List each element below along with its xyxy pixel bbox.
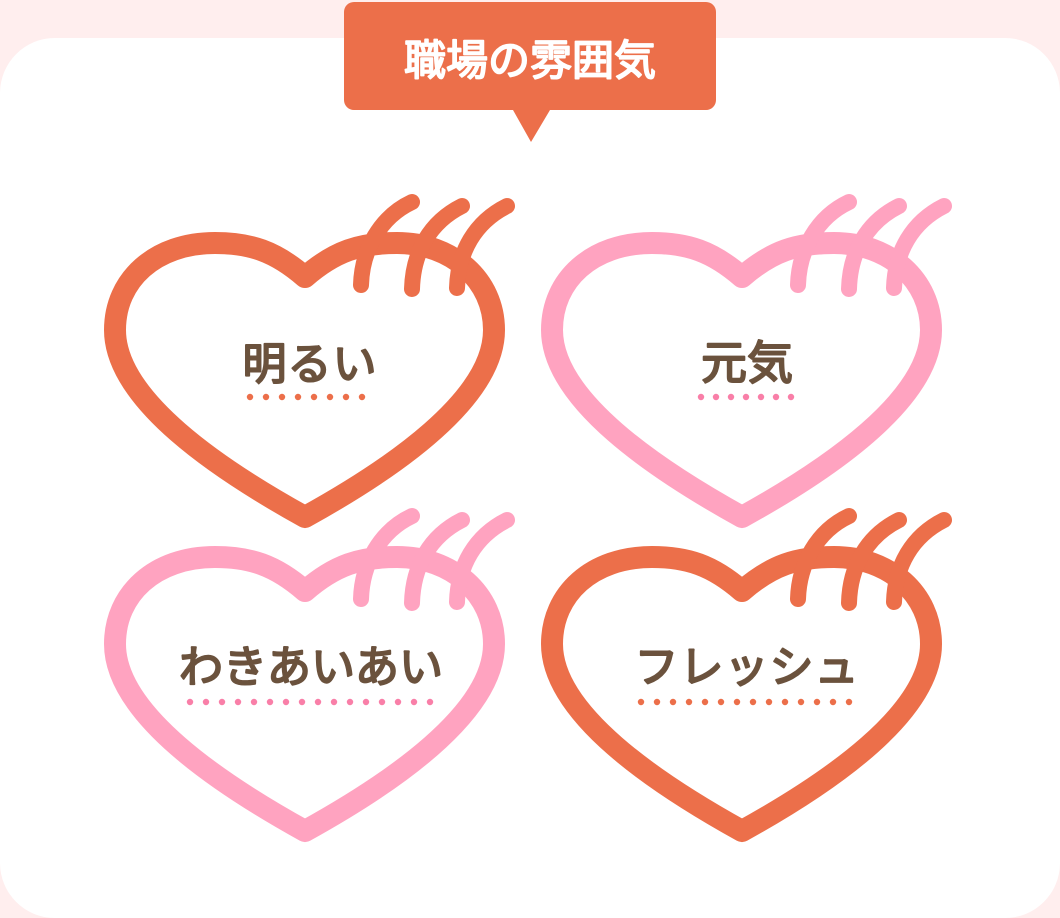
label: フレッシュ: フレッシュ — [634, 643, 860, 692]
icon: pink lashes — [361, 516, 507, 603]
heart card: フレッシュ — [552, 516, 944, 831]
label: 明るい: 明るい — [242, 340, 378, 389]
dotted underline — [641, 699, 856, 705]
icon: orange heart outline — [552, 557, 931, 831]
label: わきあいあい: わきあいあい — [179, 643, 443, 692]
icon: pink heart outline — [115, 557, 494, 831]
heart card: 明るい — [115, 202, 507, 517]
icon: pink lashes — [798, 202, 944, 289]
heart card: 元気 — [552, 202, 944, 517]
dotted underline — [701, 394, 795, 400]
icon: orange lashes — [798, 516, 944, 603]
title text: 職場の雰囲気 — [404, 37, 656, 84]
icon: orange heart outline — [115, 243, 494, 517]
icon: orange lashes — [361, 202, 507, 289]
dotted underline — [190, 699, 434, 705]
title banner — [344, 2, 716, 142]
icon: pink heart outline — [552, 243, 931, 517]
label: 元気: 元気 — [701, 337, 793, 389]
dotted underline — [250, 394, 366, 400]
banner box with pointer — [344, 2, 716, 142]
heart card: わきあいあい — [115, 516, 507, 831]
